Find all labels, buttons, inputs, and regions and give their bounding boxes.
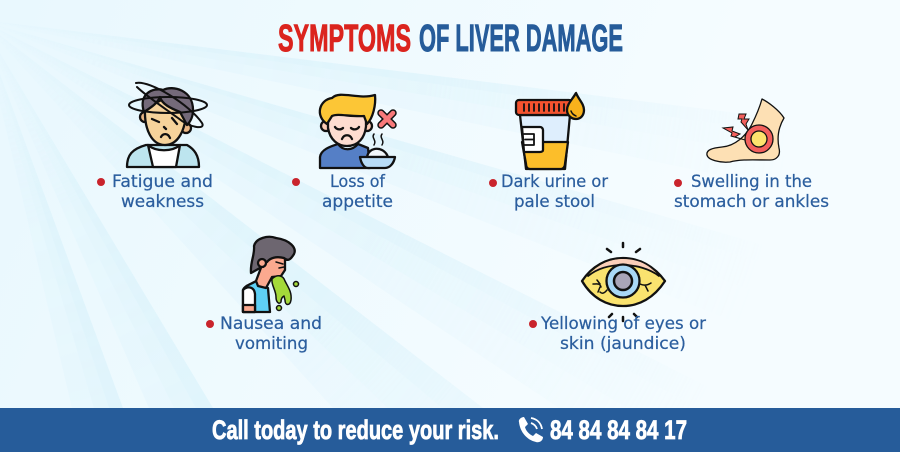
label [540,314,706,353]
icon: swollen foot [707,99,784,162]
bullet [292,178,300,186]
title: OF LIVER DAMAGE [419,18,623,60]
label: Swelling in the [691,172,812,191]
label: skin (jaundice) [560,334,686,353]
label [322,172,393,211]
icon: dizzy person [127,83,207,167]
label [674,172,829,211]
bullet [206,320,214,328]
background with light rays [0,0,614,408]
label: Yellowing of eyes or [540,314,706,333]
title: SYMPTOMS [278,18,411,60]
bullet [489,179,497,187]
icon: phone [519,417,543,442]
label: weakness [121,192,204,211]
bullet [529,320,537,328]
call to action text: Call today to reduce your risk. [212,415,499,445]
label [220,314,322,353]
label [112,172,213,211]
panel: dark urine or pale stool [489,93,608,211]
label [501,172,608,211]
bullet [97,178,105,186]
icon: boy with food bowl [320,95,395,168]
panel: swelling in the stomach or ankles [674,99,829,211]
label: Nausea and [220,314,322,333]
icon: urine sample cup [516,93,584,169]
label: pale stool [514,192,595,211]
label: stomach or ankles [674,192,829,211]
panel: yellowing of eyes or skin [529,243,706,353]
label: Dark urine or [501,172,608,191]
icon: jaundiced eye [582,243,665,321]
bullet [674,179,682,187]
title [278,18,623,60]
label: Loss of [330,172,386,191]
panel: loss of appetite [292,95,395,211]
label: Fatigue and [112,172,213,191]
panel: nausea and vomiting [206,237,322,353]
icon: person vomiting [243,237,298,312]
panel: fatigue and weakness [97,83,213,211]
label: appetite [322,192,393,211]
footer bar [0,408,900,452]
phone number: 84 84 84 84 17 [550,415,687,445]
label: vomiting [235,334,308,353]
